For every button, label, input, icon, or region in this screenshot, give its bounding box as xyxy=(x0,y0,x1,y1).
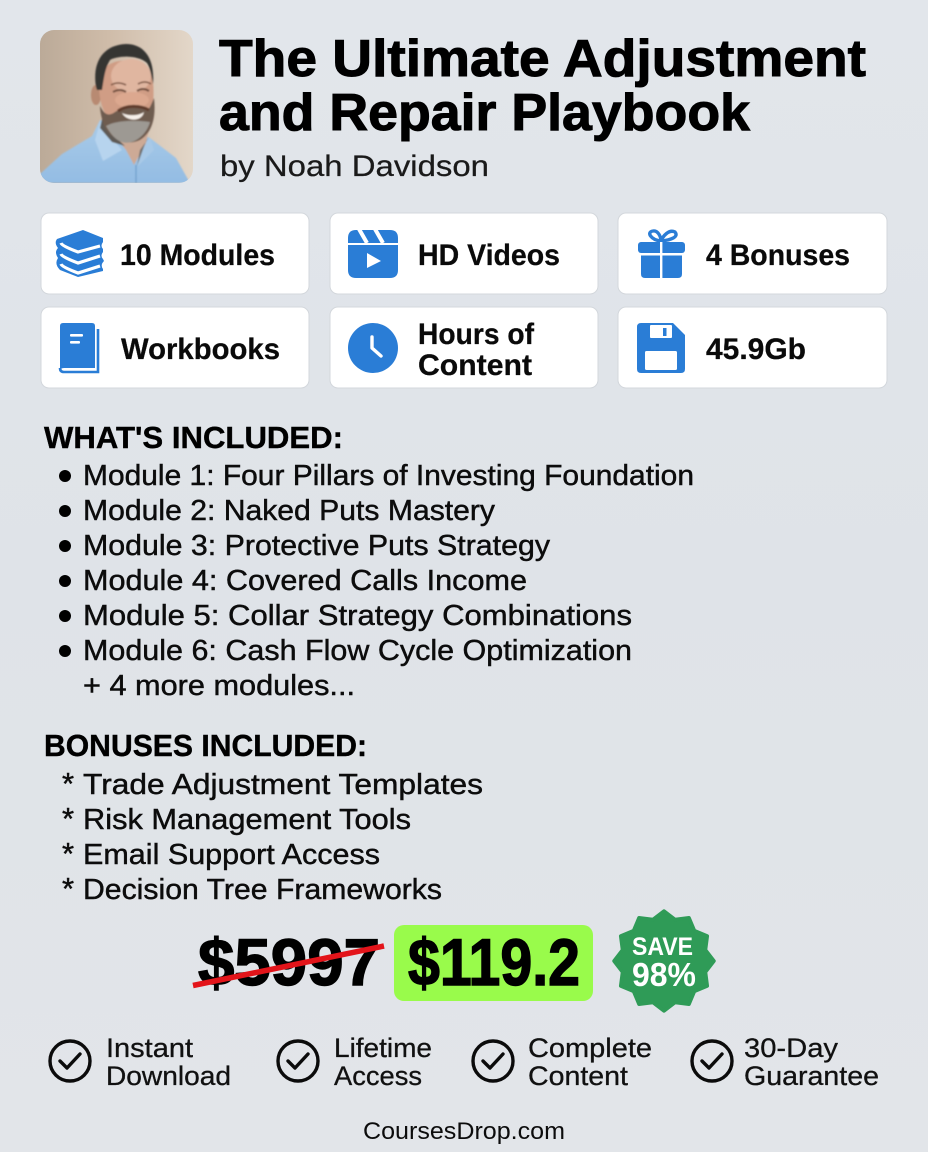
guarantee: instant download: Download xyxy=(106,1061,231,1091)
guarantee: 30-day guarantee: Guarantee xyxy=(744,1061,879,1091)
bonus list xyxy=(62,766,483,906)
title: and Repair Playbook xyxy=(219,84,750,142)
pricing row xyxy=(193,911,714,1011)
eyes xyxy=(113,89,149,92)
guarantee: complete content: Content xyxy=(528,1061,629,1091)
card: hours of content: Content xyxy=(418,349,532,382)
icon: stack of books xyxy=(56,230,104,277)
neck and open collar xyxy=(120,133,148,165)
card: file size: 45.9Gb xyxy=(706,333,806,366)
card: hours of content xyxy=(330,307,598,388)
guarantee: 30-day guarantee xyxy=(692,1033,879,1091)
bonus list: Risk Management Tools xyxy=(83,804,411,836)
shirt xyxy=(40,120,190,183)
card: file size xyxy=(618,307,887,388)
card: 10 modules: 10 Modules xyxy=(120,239,275,272)
face xyxy=(99,60,154,115)
bonus list: * xyxy=(62,801,74,836)
module list: Module 5: Collar Strategy Combinations xyxy=(83,600,632,632)
hair xyxy=(95,44,153,90)
card: HD videos: HD Videos xyxy=(418,239,560,272)
save badge: 98% xyxy=(632,956,696,993)
bonus list: * xyxy=(62,836,74,871)
icon: workbook xyxy=(60,323,98,372)
icon: gift box xyxy=(638,231,685,278)
author byline: by Noah Davidson xyxy=(220,150,489,183)
bonus list: Decision Tree Frameworks xyxy=(83,874,442,906)
bonus list: Trade Adjustment Templates xyxy=(83,769,483,801)
beard xyxy=(100,98,155,142)
module list: Module 6: Cash Flow Cycle Optimization xyxy=(83,635,632,667)
module list: Module 4: Covered Calls Income xyxy=(83,565,527,597)
header xyxy=(40,30,866,183)
card: hours of content: Hours of xyxy=(418,318,535,351)
author photo xyxy=(40,30,193,183)
icon: clock xyxy=(348,323,398,373)
guarantee: 30-day guarantee: 30-Day xyxy=(744,1033,839,1063)
guarantee: complete content xyxy=(473,1033,652,1091)
heading: WHAT'S INCLUDED: xyxy=(44,420,343,455)
icon: floppy disk xyxy=(637,323,685,373)
module list: + 4 more modules... xyxy=(83,670,355,702)
section: what's included xyxy=(44,420,694,702)
smile xyxy=(122,112,144,120)
bonus list: * xyxy=(62,871,74,906)
card: workbooks: Workbooks xyxy=(121,333,280,366)
module list: Module 2: Naked Puts Mastery xyxy=(83,495,496,527)
guarantee: instant download xyxy=(50,1033,231,1091)
guarantee: complete content: Complete xyxy=(528,1033,652,1063)
heading: BONUSES INCLUDED: xyxy=(44,728,367,763)
feature cards xyxy=(41,213,887,388)
card: 4 bonuses xyxy=(618,213,887,294)
save badge: SAVE xyxy=(632,933,693,961)
icon: video clapper xyxy=(348,229,398,278)
ear xyxy=(91,85,101,105)
new price: $119.2 xyxy=(408,925,580,999)
card: workbooks xyxy=(41,307,309,388)
save badge xyxy=(614,911,714,1011)
card: 10 modules xyxy=(41,213,309,294)
card: 4 bonuses: 4 Bonuses xyxy=(706,239,850,272)
guarantee: lifetime access: Access xyxy=(334,1061,422,1091)
old price struck through: $5997 xyxy=(198,925,380,999)
bonus list: * xyxy=(62,766,74,801)
module list: Module 3: Protective Puts Strategy xyxy=(83,530,551,562)
bonus list: Email Support Access xyxy=(83,839,380,871)
title xyxy=(219,30,866,142)
title: The Ultimate Adjustment xyxy=(219,30,866,88)
guarantee: lifetime access: Lifetime xyxy=(334,1033,432,1063)
module list: Module 1: Four Pillars of Investing Foundation xyxy=(83,460,694,492)
module list xyxy=(59,460,694,702)
guarantees row xyxy=(50,1033,879,1091)
footer site name: CoursesDrop.com xyxy=(363,1118,565,1145)
section: bonuses included xyxy=(44,728,483,906)
guarantee: instant download: Instant xyxy=(106,1033,194,1063)
guarantee: lifetime access xyxy=(278,1033,432,1091)
card: HD videos xyxy=(330,213,598,294)
